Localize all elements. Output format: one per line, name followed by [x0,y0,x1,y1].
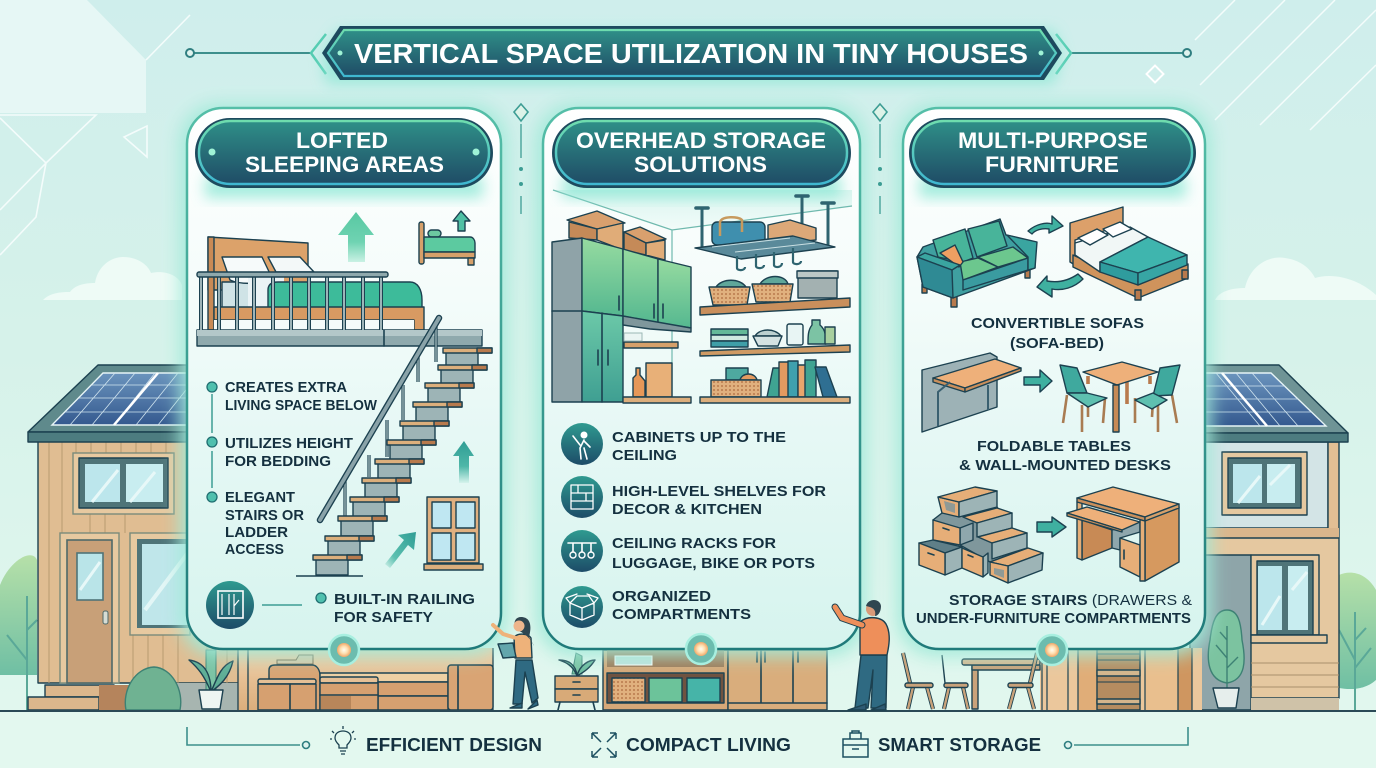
left background tree [0,555,37,710]
upper window [1222,452,1307,515]
vertical divider ornaments [514,104,887,214]
loft railing [197,272,388,330]
interior scene under panel 2 [555,650,827,710]
sofa arm [448,665,493,710]
list: storage solutions: CABINETS UP TO THE [612,429,786,446]
cabinets with boxes [552,211,691,403]
heading pill [909,118,1196,188]
ceiling rack [695,196,835,270]
house wall [1190,442,1339,710]
panel: overhead storage solutions [543,108,860,649]
list: storage solutions: ORGANIZED [612,588,711,605]
footer [187,726,1188,757]
icon: sofa [917,219,1037,307]
bullet list: lofted benefits: UTILIZES HEIGHT [225,435,353,452]
icon: wall folding table [922,353,1021,432]
open shelf with baskets [603,650,728,710]
footer item: efficient design [330,726,542,755]
sofa seat [320,673,448,710]
nightstand with plant [555,653,598,710]
icon: arrow to desk [1037,517,1066,537]
roof with solar panel [28,365,190,442]
side cabinet [258,679,316,710]
roof with solar panel [1190,365,1348,442]
footer item: smart storage [843,731,1041,757]
heading pill: OVERHEAD STORAGE [576,128,826,153]
caption: sofas: (SOFA-BED) [1010,335,1104,352]
lower window [1251,555,1327,643]
coffee table [320,677,378,710]
icon: curved arrow to sofa [1037,274,1083,297]
caption: storage stairs: UNDER-FURNITURE COMPARTMENTS [916,610,1191,627]
panel: lofted sleeping areas [187,108,501,649]
icon: small bed with arrow [419,211,475,265]
heading pill: LOFTED [296,128,388,153]
chair right [1008,653,1037,709]
heading pill: FURNITURE [985,152,1119,177]
bullet list: lofted benefits: LADDER [225,524,288,541]
house wall [38,441,240,683]
topiary plant [1208,610,1244,708]
title text: VERTICAL SPACE UTILIZATION IN TINY HOUSES [354,38,1028,69]
icon: arrow to table [1024,370,1052,392]
icon: ceiling hooks [561,530,603,572]
tiny house: left [28,365,240,710]
list: storage solutions: DECOR & KITCHEN [612,501,762,518]
window illustration [424,497,483,570]
person: man pointing [835,600,889,710]
icon: big up arrow [338,212,374,262]
icon: open box [561,586,603,628]
heading pill [195,118,493,188]
bullet list: lofted benefits: CREATES EXTRA [225,379,347,396]
bush [125,667,181,710]
heading pill [552,118,851,188]
left connector [186,34,326,74]
ladder shelf [1097,648,1140,710]
list: storage solutions: LUGGAGE, BIKE OR POTS [612,555,815,572]
icon: dining table with chairs [1060,362,1180,432]
right connector [1056,34,1191,74]
bullet list: lofted benefits: ACCESS [225,541,284,558]
right background tree [1339,573,1376,710]
list: storage solutions: COMPARTMENTS [612,606,751,623]
icon: diagonal arrow [385,532,416,568]
dining table [962,659,1040,709]
shelf 3 [700,360,850,403]
icon: person reaching [561,423,603,465]
upper window [73,453,174,514]
icon: desk [1067,487,1179,581]
icon: storage stairs [919,487,1043,583]
caption: storage stairs [916,592,1192,627]
list: storage solutions [561,423,826,628]
caption: sofas [971,315,1144,352]
footer item: compact living: COMPACT LIVING [626,735,791,755]
chair middle [942,655,968,709]
door [60,533,119,683]
bullet list: lofted benefits: FOR BEDDING [225,453,331,470]
tiny house: right [1190,365,1348,710]
interior scene under panel 3 [903,648,1202,710]
callout: railing safety: FOR SAFETY [334,609,433,626]
glowing connector dots [329,634,1067,665]
caption: tables: & WALL-MOUNTED DESKS [959,457,1171,474]
wood cabinets [728,650,827,710]
bullet list: lofted benefits: STAIRS OR [225,507,304,524]
lofted bed [197,237,482,346]
potted plant [189,650,233,709]
chair left [903,653,933,709]
heading pill: MULTI-PURPOSE [958,128,1148,153]
icon: bed [1070,207,1188,300]
panel glows [180,104,1211,656]
callout: railing safety: BUILT-IN RAILING [334,591,475,608]
person: woman with tablet [493,617,538,709]
staircase [296,318,492,576]
footer item: smart storage: SMART STORAGE [878,735,1041,755]
interior scene under panel 1 [238,648,493,710]
caption: tables: FOLDABLE TABLES [977,438,1131,455]
title banner [186,26,1191,84]
bullet list: lofted benefits: ELEGANT [225,489,295,506]
room corner [553,190,852,400]
icon: shelves [561,476,603,518]
heading pill: SLEEPING AREAS [245,152,444,177]
footer item: efficient design: EFFICIENT DESIGN [366,735,542,755]
wood wall sections [1040,648,1202,710]
caption: tables [959,438,1171,474]
icon: curved arrow to bed [1028,216,1063,234]
armchair [269,665,320,710]
list: storage solutions: CEILING RACKS FOR [612,535,776,552]
loft platform [197,330,482,346]
caption: sofas: CONVERTIBLE SOFAS [971,315,1144,332]
callout: railing safety [206,581,475,629]
list: storage solutions: CEILING [612,447,677,464]
bullet list: lofted benefits [207,379,378,558]
caption: storage stairs: STORAGE STAIRS (DRAWERS & [949,592,1192,609]
shelf 2 [700,320,850,356]
footer item: compact living [592,733,791,757]
heading pill: SOLUTIONS [634,152,767,177]
list: storage solutions: HIGH-LEVEL SHELVES FOR [612,483,826,500]
shelf 1 [700,271,850,315]
lower window [130,533,190,635]
front steps [28,683,238,710]
bullet list: lofted benefits: LIVING SPACE BELOW [225,397,378,414]
ground line [0,710,1376,712]
panel: multi-purpose furniture [903,108,1205,649]
icon: arrow near stairs [453,441,474,483]
